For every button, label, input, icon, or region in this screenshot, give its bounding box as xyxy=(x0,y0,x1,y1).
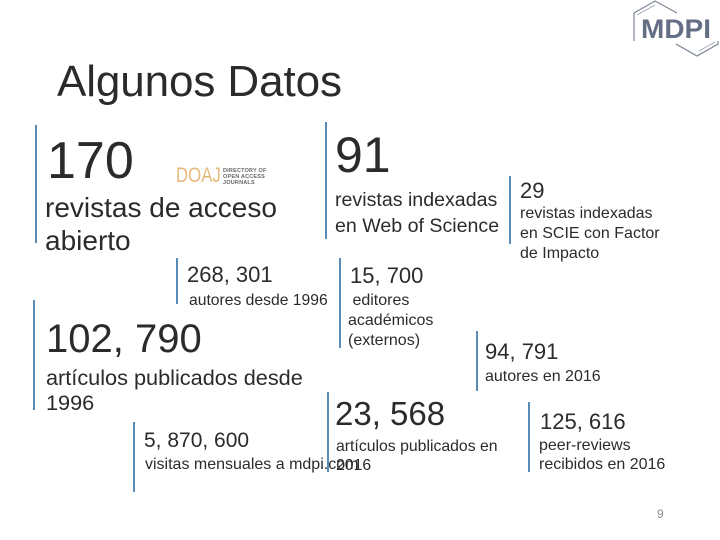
logo: DOAJ: DIRECTORY OF xyxy=(223,168,267,174)
stat: 94,791 autores en 2016: autores en 2016 xyxy=(485,368,601,385)
logo: DOAJ xyxy=(176,164,267,187)
stat: 15,700 editores académicos: 15, 700 xyxy=(350,263,423,288)
stat: 170 revistas de acceso abierto xyxy=(35,125,277,256)
stat: 23,568 artículos publicados en 2016: 23, 568 xyxy=(335,395,445,432)
page number: 9 xyxy=(657,507,664,521)
stat: 15,700 editores académicos xyxy=(339,258,433,349)
stat: 15,700 editores académicos: académicos xyxy=(348,312,433,329)
stat: 102,790 artículos publicados desde 1996: 102, 790 xyxy=(46,317,202,361)
stat: 268,301 autores desde 1996 xyxy=(176,258,328,309)
stat: 29 revistas indexadas en SCIE: 29 xyxy=(520,178,544,203)
stat: 102,790 artículos publicados desde 1996 xyxy=(33,300,303,415)
stat: 91 revistas indexadas en Web of Science: revistas indexadas xyxy=(335,189,497,211)
stat: 91 revistas indexadas en Web of Science: 91 xyxy=(335,127,391,183)
stat: 29 revistas indexadas en SCIE xyxy=(509,176,660,262)
stat: 91 revistas indexadas en Web of Science: en Web of Science xyxy=(335,215,499,237)
stat: 170 revistas de acceso abierto: abierto xyxy=(45,225,131,256)
stat: 29 revistas indexadas en SCIE: de Impacto xyxy=(520,245,599,262)
stat: 102,790 artículos publicados desde 1996: artículos publicados desde xyxy=(46,365,303,390)
stat: 94,791 autores en 2016: 94, 791 xyxy=(485,339,558,364)
stat: 170 revistas de acceso abierto: revistas de acceso xyxy=(45,192,277,223)
logo: MDPI xyxy=(633,0,719,57)
stat: 170 revistas de acceso abierto: 170 xyxy=(47,132,134,190)
stat: 125,616 peer-reviews recibidos en 2016: 125, 616 xyxy=(540,409,626,434)
stat: 23,568 artículos publicados en 2016: artículos publicados en xyxy=(336,438,498,455)
stat: 102,790 artículos publicados desde 1996: 1996 xyxy=(46,390,94,415)
stat: 29 revistas indexadas en SCIE: revistas indexadas xyxy=(520,205,653,222)
logo: DOAJ: DOAJ xyxy=(176,164,221,187)
stat: 125,616 peer-reviews recibidos en 2016 xyxy=(528,402,665,473)
logo: DOAJ: JOURNALS xyxy=(223,180,255,186)
stat: 125,616 peer-reviews recibidos en 2016: recibidos en 2016 xyxy=(539,456,665,473)
stat: 94,791 autores en 2016 xyxy=(476,331,601,391)
stat: 125,616 peer-reviews recibidos en 2016: peer-reviews xyxy=(539,437,631,454)
stat: 29 revistas indexadas en SCIE: en SCIE con Factor xyxy=(520,225,660,242)
logo: DOAJ: OPEN ACCESS xyxy=(223,174,265,180)
logo: MDPI: MDPI xyxy=(641,14,711,44)
stat: 5,870,600 visitas mensuales: 5, 870, 600 xyxy=(144,429,249,452)
stat: 268,301 autores desde 1996: autores desde 1996 xyxy=(189,292,328,309)
stat: 15,700 editores académicos: (externos) xyxy=(348,332,420,349)
stat: 15,700 editores académicos: editores xyxy=(352,292,409,309)
stat: 23,568 artículos publicados en 2016: 2016 xyxy=(336,457,371,474)
stat: 23,568 artículos publicados en 2016 xyxy=(327,392,498,474)
stat: 5,870,600 visitas mensuales: visitas mensuales a mdpi.com xyxy=(145,456,358,473)
stat: 91 revistas indexadas en Web of Science xyxy=(325,122,499,239)
stat: 5,870,600 visitas mensuales xyxy=(133,422,358,492)
title: Algunos Datos xyxy=(57,57,342,106)
stat: 268,301 autores desde 1996: 268, 301 xyxy=(187,262,273,287)
